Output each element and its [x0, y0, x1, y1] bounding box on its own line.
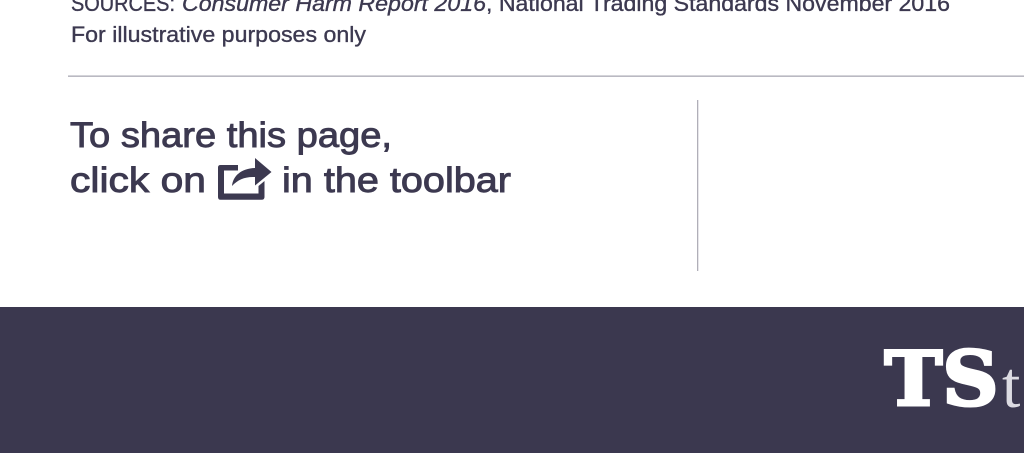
vertical divider	[697, 100, 698, 271]
logo: t	[1002, 349, 1020, 422]
sources text	[71, 0, 950, 47]
share instructions: in the toolbar	[282, 161, 511, 200]
share instructions: To share this page,	[70, 116, 392, 155]
footer band	[0, 307, 1024, 453]
share instructions	[70, 116, 511, 200]
logo: TS	[884, 335, 998, 423]
icon: share arrow	[218, 158, 272, 200]
share instructions: click on	[70, 161, 206, 200]
sources text: For illustrative purposes only	[71, 22, 366, 47]
horizontal divider	[68, 76, 1024, 77]
